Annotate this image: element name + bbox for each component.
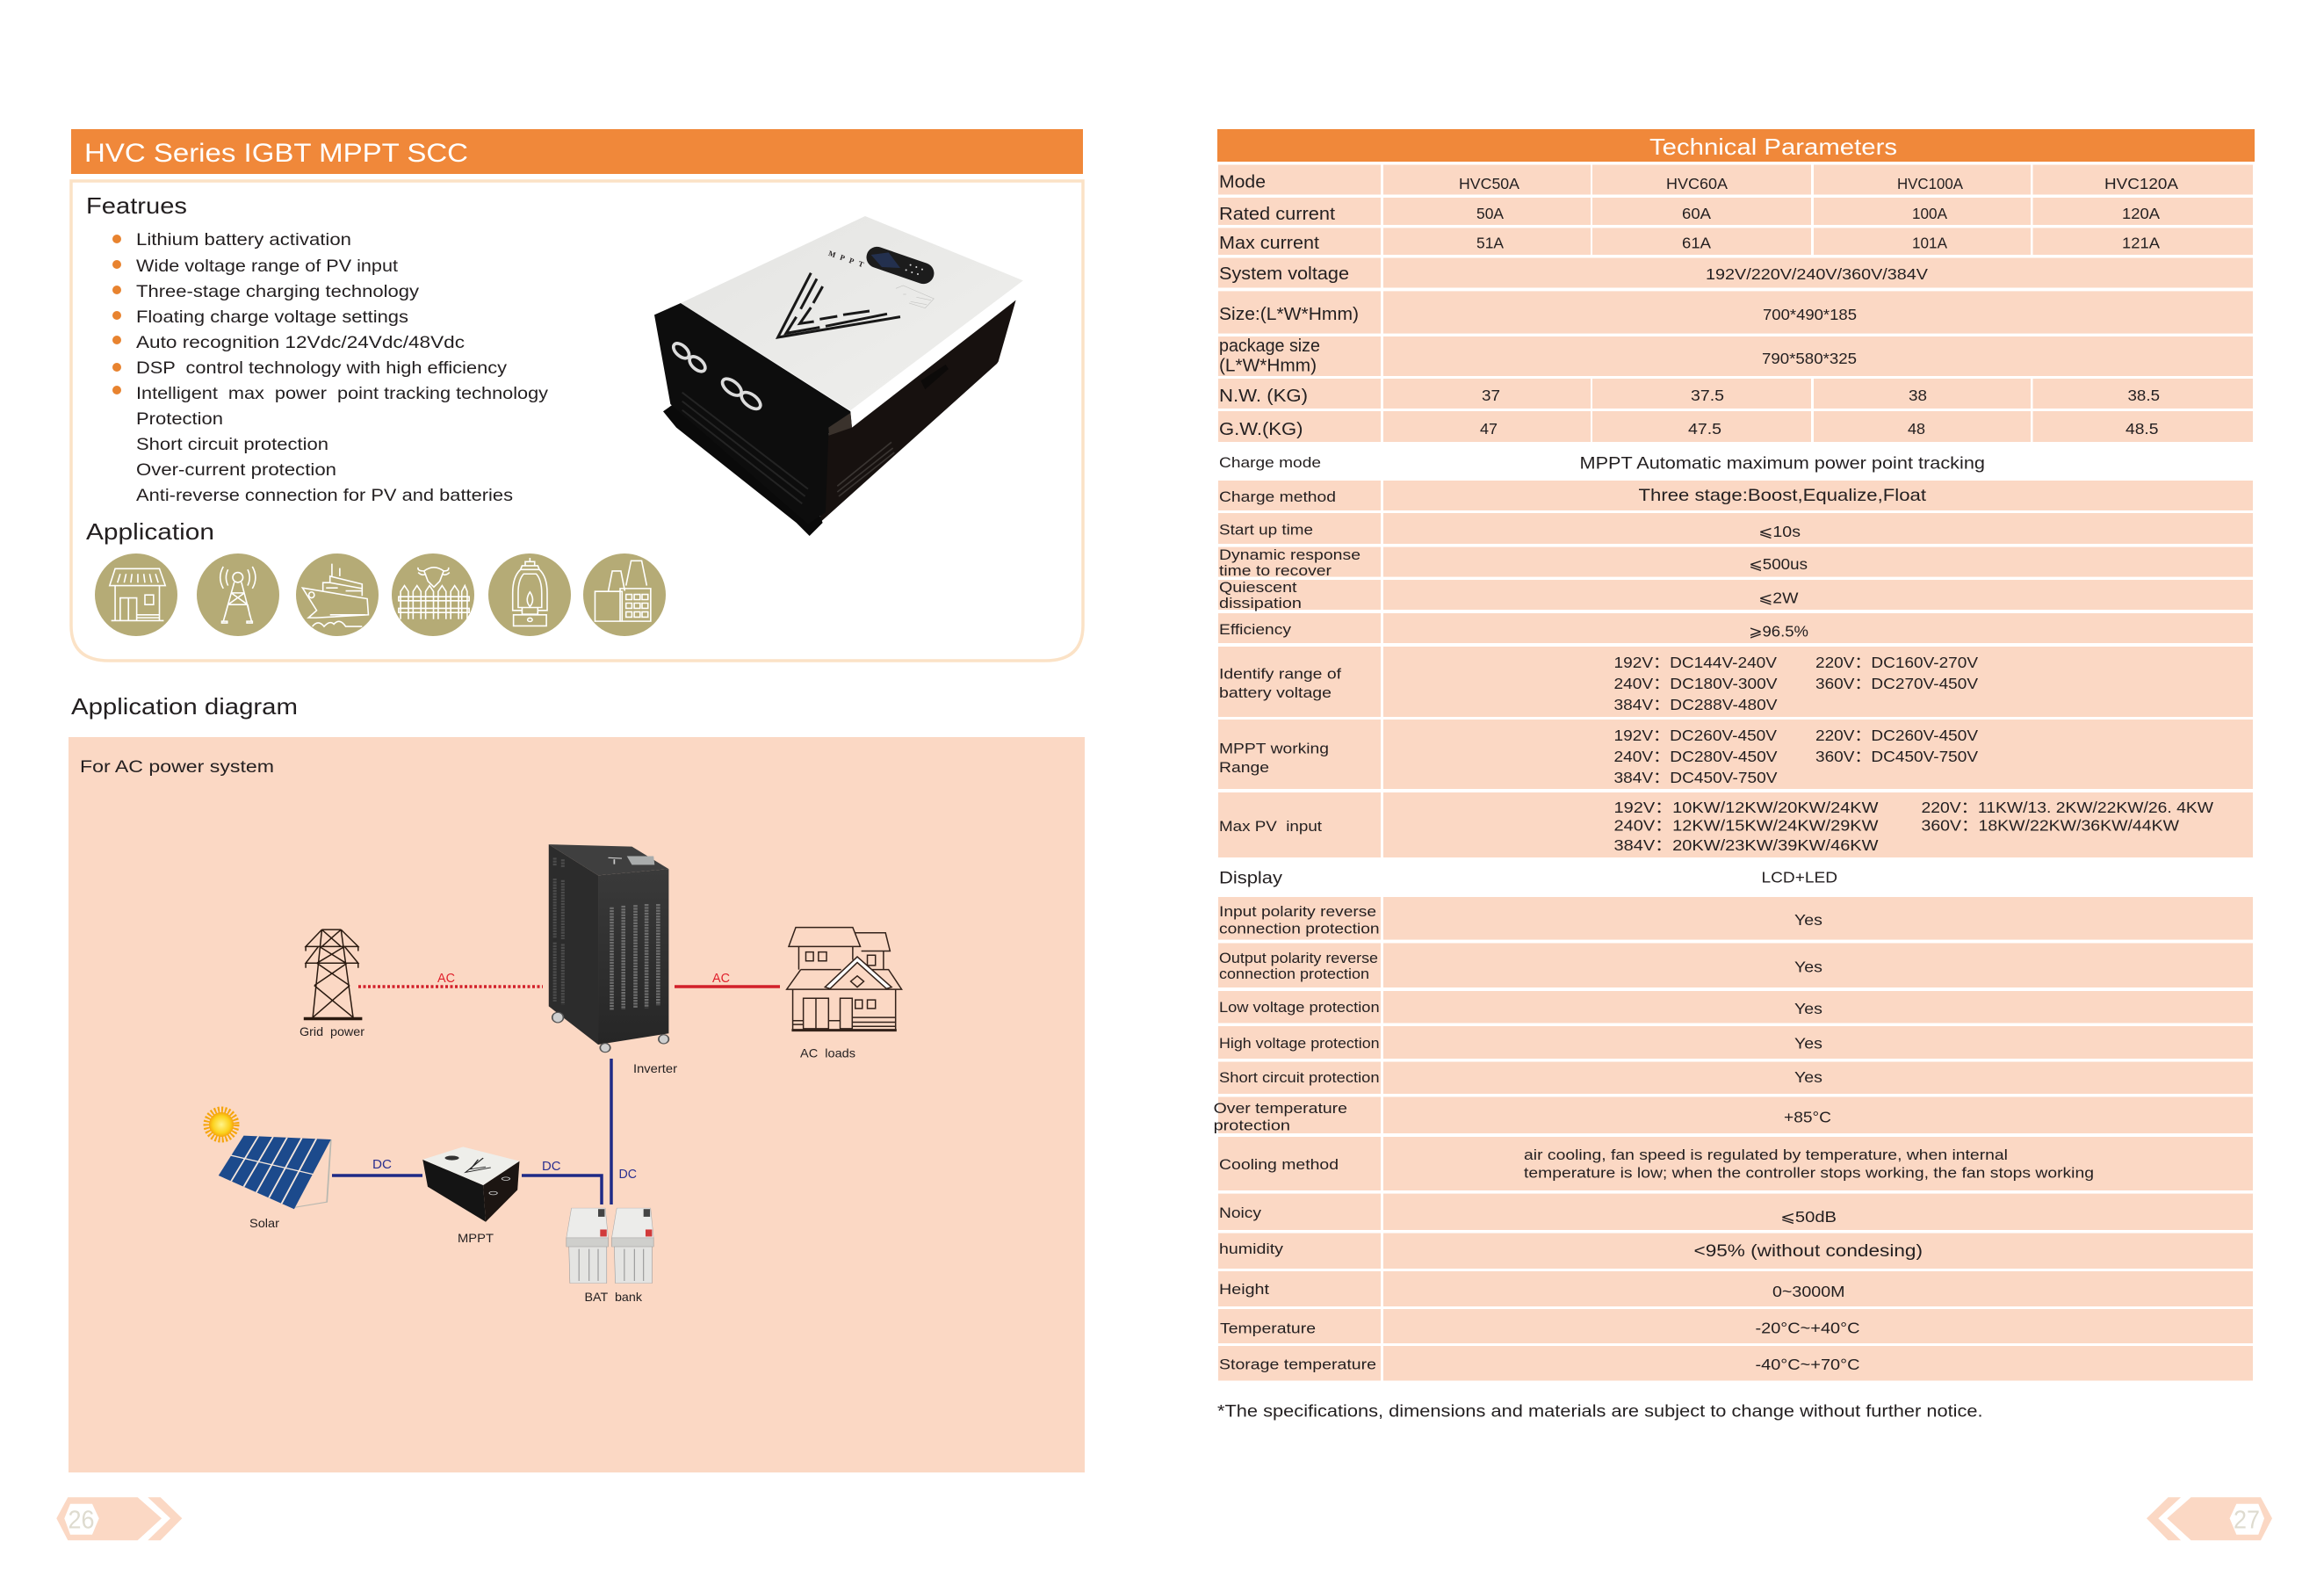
label: MPPT: MPPT: [458, 1231, 494, 1245]
features list: Anti-reverse connection for PV and batteries: [136, 486, 513, 505]
row: identify range of battery voltage: Identify range of: [1219, 666, 1341, 682]
row: efficiency: [1218, 613, 2253, 643]
footnote: *The specifications, dimensions and materials are subject to change without further notice.: [1217, 1402, 1983, 1421]
row: high voltage protection: [1218, 1026, 2253, 1059]
V logo: [778, 273, 900, 337]
controller front face: [654, 303, 852, 524]
label: inverter: Inverter: [633, 1061, 677, 1075]
row: cooling method: air cooling, fan speed is regulated by temperature, when internal: [1524, 1147, 2008, 1163]
row: start up time: Start up time: [1219, 521, 1313, 538]
row: size: 700*490*185: [1763, 306, 1857, 323]
row: efficiency: Efficiency: [1219, 621, 1292, 638]
row: max current: 61A: [1682, 234, 1711, 251]
controller right side: [819, 300, 1016, 523]
row: height: Height: [1219, 1281, 1269, 1298]
row: rated current: 120A: [2122, 205, 2160, 222]
row: mode: Mode: [1219, 172, 1266, 192]
icon: battery bank: [567, 1208, 653, 1284]
icon: sun: [206, 1110, 236, 1139]
row: mode: HVC100A: [1897, 175, 1963, 192]
row: temperature: -20°C~+40°C: [1755, 1320, 1860, 1337]
row: max PV input: 360V：18KW/22KW/36KW/44KW: [1922, 817, 2180, 835]
row: system voltage: System voltage: [1219, 264, 1349, 284]
row: identify range of battery voltage: 384V：DC288V-480V: [1614, 696, 1778, 713]
row: system voltage: 192V/220V/240V/360V/384V: [1706, 265, 1928, 283]
row: charge method: [1218, 481, 2253, 510]
row: start up time: ⩽10s: [1758, 523, 1801, 540]
features list: Over-current protection: [136, 460, 336, 480]
row: dynamic response: time to recover: [1219, 562, 1332, 579]
row: mode: HVC50A: [1459, 175, 1519, 192]
row: size: Size:(L*W*Hmm): [1219, 305, 1359, 324]
row: efficiency: ⩾96.5%: [1749, 622, 1808, 640]
row: package size: package size: [1219, 336, 1320, 356]
row: net weight: 37.5: [1691, 387, 1724, 404]
row: net weight: [1218, 379, 2253, 409]
row: gross weight: 47: [1480, 420, 1498, 438]
row: over temperature protection: protection: [1214, 1118, 1290, 1134]
row: size: [1218, 291, 2253, 334]
features list: Short circuit protection: [136, 435, 328, 454]
row: MPPT working range: 360V：DC450V-750V: [1815, 748, 1978, 765]
row: start up time: [1218, 513, 2253, 544]
row: output polarity protection: connection protection: [1219, 966, 1369, 982]
icon: factory: [595, 561, 651, 621]
row: noise: ⩽50dB: [1780, 1208, 1837, 1226]
row: high voltage protection: Yes: [1794, 1035, 1822, 1053]
row: max current: 121A: [2122, 234, 2160, 251]
controller top cover: [681, 216, 1023, 410]
row: package size: 790*580*325: [1762, 350, 1857, 367]
display panel: [863, 244, 937, 286]
row: MPPT working range: 192V：DC260V-450V: [1614, 727, 1777, 744]
panel: application diagram: [69, 737, 1085, 1472]
row: max current: [1218, 228, 2253, 255]
row: quiescent dissipation: dissipation: [1219, 595, 1302, 611]
heading: application diagram: Application diagram: [71, 693, 298, 720]
row: system voltage: [1218, 258, 2253, 288]
features list: Lithium battery activation: [136, 230, 351, 250]
icon: solar panel: [219, 1136, 331, 1209]
row: rated current: 50A: [1476, 205, 1504, 222]
row: dynamic response: ⩽500us: [1749, 555, 1808, 573]
row: high voltage protection: High voltage protection: [1219, 1035, 1380, 1052]
arrow: MPPT DC to battery: DC: [542, 1159, 561, 1174]
row: max current: 101A: [1912, 234, 1947, 251]
handle: [920, 365, 949, 389]
arrow: solar DC to MPPT: DC: [372, 1157, 392, 1172]
row: humidity: <95% (without condesing): [1693, 1242, 1923, 1261]
row: gross weight: G.W.(KG): [1219, 420, 1303, 439]
row: short circuit protection: [1218, 1061, 2253, 1094]
row: rated current: 60A: [1682, 205, 1711, 222]
heading: features: Featrues: [86, 192, 187, 219]
row: gross weight: [1218, 411, 2253, 442]
icon: house AC loads: [787, 928, 902, 1031]
application icons: [95, 553, 666, 636]
arrow: grid AC dotted line: AC: [437, 971, 455, 986]
row: net weight: 38: [1909, 387, 1927, 404]
features list: Protection: [136, 409, 223, 429]
MPPT lettering: MPPT: [827, 249, 865, 269]
row: identify range of battery voltage: 192V：DC144V-240V: [1614, 654, 1777, 671]
icon: telecom tower: [220, 567, 256, 623]
row: storage temperature: [1218, 1346, 2253, 1381]
title bar: HVC Series IGBT MPPT SCC: [84, 139, 468, 168]
row: gross weight: 48: [1908, 420, 1925, 438]
row: output polarity protection: Yes: [1794, 958, 1822, 976]
row: display: [1219, 868, 1837, 888]
icon: house: [110, 568, 165, 620]
row: height: [1218, 1271, 2253, 1306]
row: identify range of battery voltage: 220V：DC160V-270V: [1815, 654, 1978, 671]
page badge 27: 27: [2234, 1506, 2260, 1534]
row: charge method: Charge method: [1219, 488, 1336, 505]
icon: lantern: [513, 558, 547, 626]
table header: Technical Parameters: [1649, 134, 1897, 160]
label: grid power: Grid power: [300, 1024, 364, 1038]
icon: MPPT controller: [422, 1147, 519, 1222]
row: noise: [1218, 1194, 2253, 1230]
features list: Auto recognition 12Vdc/24Vdc/48Vdc: [136, 333, 465, 352]
features list: DSP control technology with high efficiency: [136, 358, 507, 378]
row: storage temperature: Storage temperature: [1219, 1356, 1376, 1372]
cable rings: [671, 341, 763, 412]
arrow: MPPT DC to battery: [522, 1159, 602, 1204]
label sticker: [896, 286, 934, 308]
row: quiescent dissipation: ⩽2W: [1758, 589, 1799, 606]
mounting flange: [663, 404, 823, 536]
features list: [112, 230, 548, 505]
row: rated current: [1218, 198, 2253, 225]
row: MPPT working range: 240V：DC280V-450V: [1614, 748, 1778, 765]
icon: pylon grid power: [304, 930, 362, 1019]
row: input polarity protection: Yes: [1794, 911, 1822, 929]
label: AC loads: AC loads: [800, 1045, 855, 1060]
row: charge mode: [1219, 453, 1985, 473]
row: input polarity protection: Input polarity reverse: [1219, 903, 1376, 920]
row: max PV input: [1218, 792, 2253, 857]
row: output polarity protection: Output polarity reverse: [1219, 950, 1378, 966]
row: cooling method: [1218, 1137, 2253, 1190]
row: quiescent dissipation: [1218, 579, 2253, 611]
row: max PV input: Max PV input: [1219, 818, 1322, 835]
panel: right page technical parameters: [1214, 129, 2272, 1540]
title bar: [71, 129, 1083, 174]
row: max current: Max current: [1219, 234, 1319, 253]
row: input polarity protection: connection protection: [1219, 921, 1380, 937]
row: MPPT working range: MPPT working: [1219, 740, 1329, 757]
row: low voltage protection: [1218, 991, 2253, 1023]
features list: Floating charge voltage settings: [136, 307, 408, 327]
row: short circuit protection: Yes: [1794, 1068, 1822, 1086]
row: height: 0~3000M: [1772, 1283, 1844, 1300]
row: over temperature protection: [1214, 1096, 2253, 1134]
row: storage temperature: -40°C~+70°C: [1755, 1356, 1860, 1373]
icon: inverter cabinet: [549, 844, 668, 1053]
row: rated current: 100A: [1912, 205, 1947, 222]
row: display: LCD+LED: [1762, 868, 1837, 886]
row: quiescent dissipation: Quiescent: [1219, 579, 1297, 596]
row: mode: HVC60A: [1666, 175, 1728, 192]
row: MPPT working range: Range: [1219, 759, 1269, 776]
arrow: inverter DC to battery: DC: [618, 1167, 637, 1182]
arrow: solar DC to MPPT: [332, 1157, 422, 1176]
row: input polarity protection: [1218, 897, 2253, 940]
row: identify range of battery voltage: 240V：DC180V-300V: [1614, 675, 1778, 692]
row: max PV input: 240V：12KW/15KW/24KW/29KW: [1614, 817, 1879, 835]
row: low voltage protection: Yes: [1794, 1000, 1822, 1017]
subtitle: AC power system: For AC power system: [80, 758, 274, 777]
page badge 27: [2147, 1497, 2272, 1540]
features list: Wide voltage range of PV input: [136, 257, 399, 276]
row: net weight: 38.5: [2127, 387, 2160, 404]
row: MPPT working range: [1218, 720, 2253, 789]
row: humidity: humidity: [1219, 1241, 1284, 1257]
row: temperature: [1218, 1309, 2253, 1343]
row: mode: HVC120A: [2104, 175, 2178, 192]
row: MPPT working range: 220V：DC260V-450V: [1815, 727, 1978, 744]
row: max PV input: 192V：10KW/12KW/20KW/24KW: [1614, 799, 1879, 816]
row: noise: Noicy: [1219, 1204, 1262, 1221]
row: gross weight: 48.5: [2126, 420, 2159, 438]
row: over temperature protection: +85°C: [1784, 1109, 1831, 1126]
page badge 26: 26: [69, 1506, 95, 1534]
row: cooling method: temperature is low; when the controller stops working, the fan stops working: [1524, 1165, 2094, 1181]
row: output polarity protection: [1218, 944, 2253, 987]
features list: Intelligent max power point tracking technology: [136, 384, 548, 403]
product photo: MPPT charge controller: [654, 216, 1023, 536]
row: charge mode: Charge mode: [1219, 454, 1321, 471]
row: net weight: 37: [1482, 387, 1500, 404]
row: charge mode: MPPT Automatic maximum power point tracking: [1579, 453, 1985, 473]
row: package size: [1218, 336, 2253, 376]
table header: [1217, 129, 2255, 162]
row: MPPT working range: 384V：DC450V-750V: [1614, 769, 1778, 786]
label: solar: Solar: [249, 1216, 279, 1230]
row: identify range of battery voltage: 360V：DC270V-450V: [1815, 675, 1978, 692]
heading: application: Application: [86, 518, 214, 545]
row: dynamic response: [1218, 546, 2253, 579]
arrow: AC to loads: AC: [712, 971, 730, 986]
panel: features and application: [71, 181, 1083, 661]
row: temperature: Temperature: [1220, 1320, 1316, 1337]
features list: Three-stage charging technology: [136, 282, 419, 301]
row: dynamic response: Dynamic response: [1219, 546, 1360, 563]
row: mode: [1218, 165, 2253, 195]
arrow: AC to loads: [675, 971, 780, 987]
icon: cow and fence: [399, 568, 469, 619]
row: low voltage protection: Low voltage protection: [1219, 999, 1380, 1016]
row: max PV input: 384V：20KW/23KW/39KW/46KW: [1614, 836, 1879, 854]
row: net weight: N.W. (KG): [1219, 387, 1308, 406]
row: identify range of battery voltage: battery voltage: [1219, 684, 1332, 701]
row: over temperature protection: Over temperature: [1214, 1100, 1347, 1117]
panel: left page: [56, 129, 1085, 1540]
row: charge method: Three stage:Boost,Equalize,Float: [1639, 486, 1927, 505]
label: BAT bank: BAT bank: [585, 1290, 643, 1304]
row: max PV input: 220V：11KW/13. 2KW/22KW/26. 4KW: [1922, 799, 2214, 816]
row: gross weight: 47.5: [1688, 420, 1721, 438]
row: max current: 51A: [1476, 234, 1504, 251]
row: identify range of battery voltage: [1218, 647, 2253, 717]
row: short circuit protection: Short circuit protection: [1219, 1069, 1380, 1086]
row: package size: (L*W*Hmm): [1219, 356, 1317, 375]
icon: ship: [302, 564, 368, 626]
page badge 26: [56, 1497, 182, 1540]
row: humidity: [1218, 1233, 2253, 1269]
row: cooling method: Cooling method: [1219, 1156, 1339, 1173]
row: display: Display: [1219, 869, 1282, 888]
row: rated current: Rated current: [1219, 205, 1335, 224]
